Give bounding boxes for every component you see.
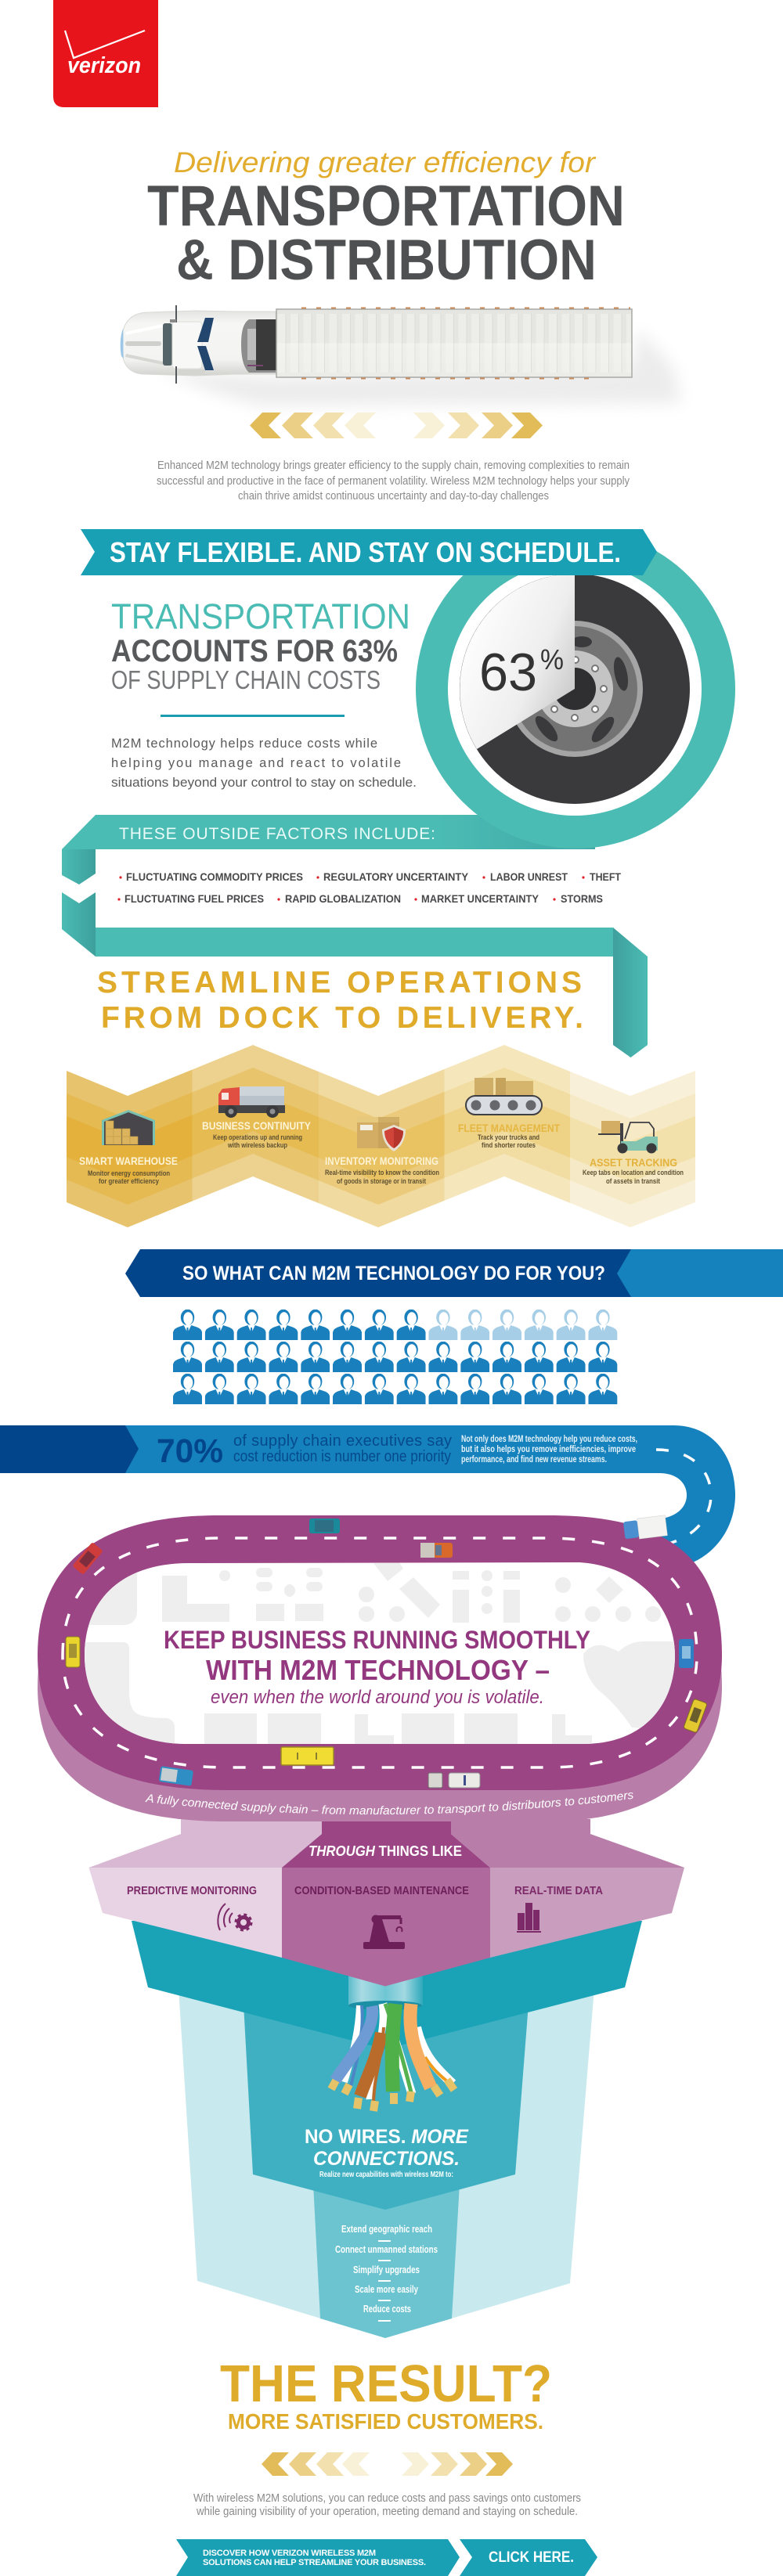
text: fleet management: FLEET MANAGEMENT [458, 1122, 560, 1134]
title: & DISTRIBUTION [176, 229, 597, 292]
racetrack road with city map [38, 1515, 722, 1821]
stat: 70 percent: 70% [157, 1432, 223, 1470]
list: capabilities [335, 2223, 438, 2322]
list: capabilities: Simplify upgrades [353, 2264, 420, 2275]
hood: three benefit panels on stem with teal layers [132, 1921, 642, 2338]
call to action: discover [176, 2539, 460, 2576]
track headline: even when the world around you is volatile. [211, 1687, 544, 1708]
text: inventory monitoring: INVENTORY MONITORING [325, 1155, 438, 1167]
pictogram: 70 percent of executives [173, 1310, 617, 1404]
text: asset tracking: ASSET TRACKING [590, 1156, 677, 1169]
list: outside factors: LABOR UNREST [490, 870, 568, 883]
text: smart warehouse: SMART WAREHOUSE [79, 1155, 178, 1167]
banner: stay flexible [81, 529, 657, 575]
icon: conveyor belt with boxes [466, 1078, 542, 1115]
heading: no wires more connections: CONNECTIONS. [313, 2148, 460, 2170]
banner: so what can M2M do [125, 1249, 783, 1297]
chevron divider bottom [262, 2452, 513, 2476]
text: not only does M2M: performance, and find new revenue streams. [461, 1454, 607, 1465]
track headline: KEEP BUSINESS RUNNING SMOOTHLY [164, 1626, 590, 1654]
wheel ring with 63 percent pie [416, 529, 735, 848]
icon: forklift [598, 1121, 658, 1154]
list: outside factors: REGULATORY UNCERTAINTY [323, 870, 469, 883]
panel label: condition-based maintenance with robot icon: CONDITION-BASED MAINTENANCE [294, 1884, 469, 1897]
list: capabilities: Extend geographic reach [341, 2223, 432, 2235]
logo: Verizon red tab [53, 0, 158, 107]
call to action: discover: SOLUTIONS CAN HELP STREAMLINE YOUR BUSINESS. [203, 2558, 426, 2567]
closing paragraph: With wireless M2M solutions, you can reduce costs and pass savings onto customers [193, 2491, 581, 2505]
headline: transportation accounts for 63 percent [111, 596, 410, 694]
heading: the result: THE RESULT? [220, 2354, 552, 2413]
heading: no wires more connections [305, 2126, 469, 2179]
text: smart warehouse: for greater efficiency [99, 1177, 160, 1186]
text: smart warehouse [79, 1155, 178, 1186]
headline: transportation accounts for 63 percent: OF SUPPLY CHAIN COSTS [111, 665, 381, 694]
text: inventory monitoring [325, 1155, 439, 1186]
track headline: WITH M2M TECHNOLOGY – [206, 1654, 550, 1686]
intro paragraph: successful and productive in the face of permanent volatility. Wireless M2M technology helps your supply [157, 474, 630, 488]
title: Delivering greater efficiency for [174, 146, 597, 178]
text: fleet management: find shorter routes [482, 1141, 536, 1150]
panel label: predictive monitoring with icon [127, 1884, 257, 1930]
icon: cable with wires [331, 1973, 454, 2111]
text: business continuity: with wireless backup [227, 1141, 287, 1150]
stat: 70 percent: of supply chain executives say [233, 1432, 452, 1450]
banner: so what can M2M do: SO WHAT CAN M2M TECHNOLOGY DO FOR YOU? [182, 1263, 605, 1284]
list: outside factors [117, 870, 621, 905]
heading: no wires more connections: NO WIRES. MORE [305, 2126, 469, 2148]
icon: delivery truck [218, 1086, 285, 1118]
ribbon: outside factors band and folds [62, 815, 648, 1057]
text: inventory monitoring: of goods in storage or in transit [337, 1177, 427, 1186]
truck illustration seen from above [121, 305, 681, 405]
text: not only does M2M [461, 1433, 637, 1465]
wheel ring with 63 percent pie: 63 [479, 643, 537, 702]
text: inventory monitoring: Real-time visibility to know the condition [325, 1169, 439, 1177]
panels: predictive, condition-based, real-time: THROUGH THINGS LIKE [309, 1843, 462, 1859]
list: capabilities: Scale more easily [355, 2283, 419, 2295]
body text: M2M reduces costs: situations beyond your control to stay on schedule. [111, 776, 417, 790]
banner: stay flexible: STAY FLEXIBLE. AND STAY ON SCHEDULE. [110, 536, 621, 568]
panel label: condition-based maintenance with robot icon [294, 1884, 469, 1949]
text: business continuity: Keep operations up and running [213, 1133, 302, 1142]
icon: warehouse [102, 1110, 155, 1145]
blue road band [0, 1425, 735, 1564]
stat: 70 percent: cost reduction is number one priority [233, 1448, 451, 1465]
icon: box with shield [357, 1117, 406, 1151]
chevron divider [250, 413, 543, 438]
curved caption on track wall: A fully connected supply chain – from manufacturer to transport to distributors to customers [145, 1792, 633, 1815]
zigzag panel background [67, 1045, 695, 1227]
closing paragraph [193, 2491, 581, 2518]
text: not only does M2M: but it also helps you remove inefficiencies, improve [461, 1443, 636, 1454]
text: fleet management: Track your trucks and [478, 1133, 539, 1142]
call to action: discover: DISCOVER HOW VERIZON WIRELESS M2M [203, 2549, 376, 2558]
text: asset tracking: Keep tabs on location and condition [583, 1169, 684, 1177]
text: not only does M2M: Not only does M2M technology help you reduce costs, [461, 1433, 637, 1444]
heading: streamline operations [97, 966, 583, 1035]
body text: M2M reduces costs [111, 737, 417, 790]
text: business continuity [202, 1119, 312, 1150]
call to action: click here: CLICK HERE. [489, 2549, 574, 2566]
list: outside factors: THEFT [590, 870, 621, 883]
logo: Verizon red tab: verizon [67, 53, 141, 78]
list: outside factors: FLUCTUATING FUEL PRICES [124, 892, 264, 905]
intro paragraph: chain thrive amidst continuous uncertainty and day-to-day challenges [238, 489, 549, 503]
divider line [161, 715, 345, 717]
panel label: predictive monitoring with icon: PREDICTIVE MONITORING [127, 1884, 257, 1897]
text: asset tracking [583, 1156, 684, 1186]
title: TRANSPORTATION [147, 175, 625, 238]
text: asset tracking: of assets in transit [606, 1177, 661, 1186]
call to action: click here [460, 2539, 597, 2576]
stat: 70 percent [157, 1432, 452, 1470]
body text: M2M reduces costs: helping you manage and react to volatile [111, 756, 401, 770]
headline: transportation accounts for 63 percent: ACCOUNTS FOR 63% [111, 634, 398, 668]
list: capabilities: Reduce costs [363, 2303, 411, 2315]
intro paragraph [157, 459, 630, 503]
list: capabilities: Connect unmanned stations [335, 2243, 438, 2255]
vehicles on track [66, 1515, 707, 1788]
closing paragraph: while gaining visibility of your operation, meeting demand and staying on schedule. [196, 2505, 578, 2518]
wheel ring with 63 percent pie: % [540, 643, 564, 676]
panel label: real-time data with bar chart icon: REAL-TIME DATA [514, 1884, 603, 1897]
list: outside factors: MARKET UNCERTAINTY [421, 892, 539, 905]
heading: the result: MORE SATISFIED CUSTOMERS. [228, 2409, 543, 2434]
heading: streamline operations: FROM DOCK TO DELIVERY. [101, 1001, 583, 1035]
body text: M2M reduces costs: M2M technology helps reduce costs while [111, 737, 377, 751]
track headline [164, 1626, 590, 1708]
text: fleet management [458, 1122, 560, 1150]
heading: no wires more connections: Realize new capabilities with wireless M2M to: [319, 2171, 453, 2179]
list: outside factors: FLUCTUATING COMMODITY PRICES [126, 870, 303, 883]
list: outside factors: STORMS [561, 892, 603, 905]
intro paragraph: Enhanced M2M technology brings greater efficiency to the supply chain, removing complexities to remain [157, 459, 630, 472]
heading: streamline operations: STREAMLINE OPERATIONS [97, 966, 582, 1000]
text: smart warehouse: Monitor energy consumption [88, 1169, 170, 1178]
headline: transportation accounts for 63 percent: TRANSPORTATION [111, 596, 410, 636]
list: outside factors: RAPID GLOBALIZATION [285, 892, 401, 905]
panels: predictive, condition-based, real-time [89, 1819, 684, 1987]
text: business continuity: BUSINESS CONTINUITY [202, 1119, 312, 1132]
ribbon: outside factors band and folds: THESE OUTSIDE FACTORS INCLUDE: [119, 825, 435, 843]
panel label: real-time data with bar chart icon [514, 1884, 603, 1933]
title [147, 146, 625, 292]
